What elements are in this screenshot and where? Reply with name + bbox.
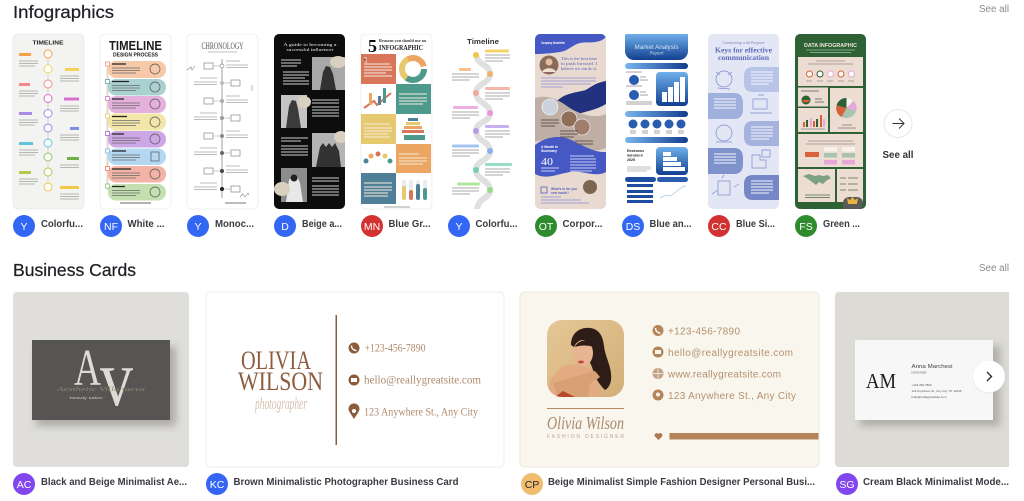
avatar: Y: [13, 215, 35, 237]
card title: Brown Minimalistic Photographer Business Card: [234, 476, 458, 488]
portrait photo: [547, 320, 624, 397]
thumbnail: five reasons: INFOGRAPHIC: [379, 44, 423, 52]
design: Olivia Wilson photographer card: photographer: [254, 394, 307, 413]
mockup: Anna Marchesi white card: DESIGNER: [912, 370, 926, 374]
card title: Beige a...: [302, 218, 342, 230]
thumbnail: corporate wave report: Company Newsletter: [541, 41, 565, 45]
thumbnail: corporate wave report: [535, 34, 606, 209]
mockup: Anna Marchesi white card: [835, 292, 1009, 467]
thumbnail: corporate wave report: What's in for you: [551, 186, 577, 191]
card: Green data infographic: [795, 34, 866, 237]
avatar: DS: [622, 215, 644, 237]
card: Corporate monthly newsletter: [535, 34, 606, 237]
card title: Green ...: [823, 218, 860, 230]
thumbnail: data infographic: DATA INFOGRAPHIC: [804, 43, 857, 49]
thumbnail: keys for effective communication: Keys for effective: [715, 46, 773, 54]
card title: Colorfu...: [476, 218, 518, 230]
mockup: Anna Marchesi white card: AM: [866, 369, 896, 393]
thumbnail: market analysis report: Report: [650, 50, 664, 56]
thumbnail: market analysis report: 2025: [627, 158, 635, 162]
mockup: dark Aesthetic Villanueva card: beauty salon: [70, 396, 103, 400]
business card: Black and Beige: [13, 292, 189, 495]
avatar: FS: FS: [799, 221, 813, 233]
thumbnail: market analysis report: [625, 34, 688, 203]
card title: Blue an...: [650, 218, 692, 230]
icon: location pin: [349, 403, 360, 419]
mockup: dark Aesthetic Villanueva card: A: [74, 340, 101, 397]
avatar: KC: KC: [210, 479, 225, 491]
card: Beige influencer guide: [274, 34, 348, 237]
avatar: D: D: [281, 221, 289, 233]
thumbnail: corporate wave report: This is the best time: [561, 56, 597, 61]
thumbnail: five reasons: Reasons you should use an: [379, 38, 427, 43]
card title: Beige Minimalist Simple Fashion Designer Personal Busi...: [548, 476, 815, 488]
thumbnail: keys for effective communication: Connecting with Purpose: [722, 40, 765, 45]
thumbnail: guide to becoming an influencer: [274, 34, 348, 209]
thumbnail: timeline design process: TIMELINE: [109, 39, 162, 53]
design: Olivia Wilson fashion card: hello@reallygreatsite.com: [668, 348, 793, 359]
business card: Brown Minimalistic Photographer: [206, 292, 504, 495]
business card: Cream Black Minimalist: [835, 292, 1009, 495]
mockup: Anna Marchesi white card: 123 Anywhere St., Any City, ST 12345: [912, 389, 962, 393]
heading: Infographics: Infographics: [13, 2, 114, 22]
avatar: NF: NF: [104, 221, 118, 233]
icon: phone: [348, 342, 360, 354]
avatar: SG: SG: [839, 479, 855, 491]
avatar: CC: CC: [711, 221, 727, 233]
icon: heart: [655, 433, 662, 440]
heading: Business Cards: Business Cards: [13, 260, 136, 280]
avatar: NF: [100, 215, 122, 237]
thumbnail: keys for effective communication: communication: [718, 53, 770, 62]
mockup: Anna Marchesi white card: +123-456-7890: [912, 383, 932, 387]
thumbnail: winding timeline: [452, 38, 512, 209]
thumbnail: five reasons: [361, 34, 432, 209]
card title: Corpor...: [562, 218, 603, 230]
thumbnail: corporate wave report: 40: [541, 157, 553, 168]
design: Olivia Wilson photographer card: WILSON: [238, 367, 323, 396]
avatar: SG: [836, 473, 858, 495]
icon: mail: [652, 346, 664, 358]
thumbnail: corporate wave report: to push forward. I: [561, 61, 598, 66]
avatar: FS: [795, 215, 817, 237]
design: Olivia Wilson photographer card: +123-456-7890: [364, 340, 426, 354]
button: see all arrow: [884, 110, 912, 138]
card title: Blue Si...: [736, 218, 775, 230]
thumbnail: corporate wave report: believe we can do it.: [561, 66, 597, 71]
design: Olivia Wilson fashion card: FASHION DESIGNER: [547, 434, 624, 440]
card: Colorful winding timeline: [448, 34, 519, 237]
mockup: dark Aesthetic Villanueva card: [13, 292, 189, 467]
icon: globe: [652, 368, 664, 379]
thumbnail: chronology: [187, 34, 258, 209]
avatar: Y: [187, 215, 209, 237]
avatar: AC: AC: [17, 479, 32, 491]
design: Olivia Wilson fashion card: +123-456-7890: [668, 326, 740, 338]
design: Olivia Wilson fashion card: Olivia Wilson: [547, 413, 624, 433]
design: Olivia Wilson photographer card: [206, 292, 504, 467]
card title: Cream Black Minimalist Mode...: [863, 476, 1009, 488]
card: Five reasons infographic: [361, 34, 432, 237]
card: Monochrome chronology: [187, 34, 258, 237]
avatar: MN: MN: [364, 221, 380, 233]
link: see all label: See all: [882, 150, 914, 161]
thumbnail: winding timeline: Timeline: [467, 37, 499, 46]
avatar: DS: DS: [626, 221, 640, 233]
mockup: Anna Marchesi white card: hello@reallygreatsite.com: [912, 395, 947, 399]
avatar: AC: [13, 473, 35, 495]
design: Olivia Wilson photographer card: 123 Anywhere St., Any City: [364, 404, 478, 418]
thumbnail: data infographic: [795, 34, 866, 209]
card: Blue market analysis: [622, 34, 692, 237]
avatar: OT: [535, 215, 557, 237]
mockup: dark Aesthetic Villanueva card: Aesthetic Villanueva: [55, 386, 145, 393]
icon: crown badge: [847, 197, 858, 204]
avatar: CP: CP: [525, 479, 539, 491]
design: Olivia Wilson fashion card: 123 Anywhere St., Any City: [668, 391, 796, 402]
thumbnail: corporate wave report: A Month in: [541, 145, 558, 149]
avatar: Y: Y: [455, 221, 463, 233]
thumbnail: market analysis report: Electronics: [627, 149, 644, 153]
icon: location: [652, 390, 664, 400]
thumbnail: chronology: CHRONOLOGY: [202, 41, 244, 51]
thumbnail: timeline design process: DESIGN PROCESS: [113, 52, 158, 58]
avatar: D: [274, 215, 296, 237]
avatar: Y: Y: [194, 221, 202, 233]
thumbnail: guide to becoming an influencer: A guide to becoming a: [284, 42, 336, 47]
mockup: dark Aesthetic Villanueva card: v: [100, 335, 133, 423]
design: Olivia Wilson photographer card: hello@reallygreatsite.com: [364, 372, 482, 386]
card title: Blue Gr...: [388, 218, 431, 230]
card title: Black and Beige Minimalist Ae...: [41, 476, 187, 488]
icon: phone: [652, 325, 664, 336]
thumbnail: timeline history: TIMELINE: [32, 40, 64, 46]
thumbnail: keys for effective communication: [708, 34, 779, 209]
card title: Monoc...: [215, 218, 254, 230]
avatar: KC: [206, 473, 228, 495]
avatar: CC: [708, 215, 730, 237]
thumbnail: market analysis report: Market Analysis: [634, 45, 678, 51]
card: White timeline design process: [100, 34, 171, 237]
icon: mail: [348, 374, 360, 386]
mockup: Anna Marchesi white card: Anna Marchesi: [912, 364, 952, 370]
thumbnail: five reasons: 5: [368, 36, 377, 56]
link: see all business cards: See all: [979, 263, 1009, 274]
button: next arrow: [973, 360, 1005, 393]
thumbnail: market analysis report: lead sales in: [627, 154, 643, 158]
avatar: OT: OT: [539, 221, 554, 233]
design: Olivia Wilson photographer card: OLIVIA: [241, 346, 311, 375]
business card: Beige Fashion Designer: [520, 292, 819, 495]
thumbnail: corporate wave report: Summary: [541, 149, 557, 153]
avatar: CP: [521, 473, 543, 495]
card title: White ...: [128, 218, 165, 230]
link: see all infographics: See all: [979, 4, 1009, 15]
avatar: Y: [448, 215, 470, 237]
avatar: Y: Y: [20, 221, 28, 233]
card: Blue simple communication: [708, 34, 779, 237]
thumbnail: guide to becoming an influencer: successful influencer: [286, 47, 334, 52]
card title: Colorfu...: [41, 218, 83, 230]
design: Olivia Wilson fashion card: www.reallygreatsite.com: [667, 370, 781, 380]
thumbnail: timeline history: [13, 34, 84, 209]
avatar: MN: [361, 215, 383, 237]
thumbnail: corporate wave report: next month?: [551, 190, 569, 195]
design: Olivia Wilson fashion card: [520, 292, 819, 467]
thumbnail: timeline design process: [100, 34, 171, 209]
card: Colorful timeline: [13, 34, 84, 237]
